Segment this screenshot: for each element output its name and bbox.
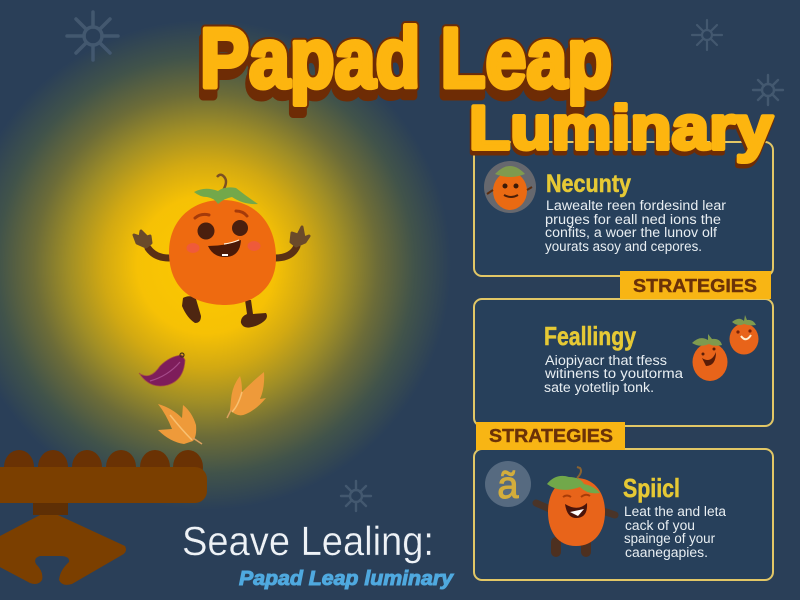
icon: purple leaf <box>139 353 185 386</box>
icon: snowflake right <box>753 75 783 105</box>
body text: Feallingy: sate yotetlip tonk. <box>544 380 654 395</box>
platform post <box>33 503 68 515</box>
tab: strategies upper <box>620 271 771 299</box>
body <box>169 200 276 305</box>
body text: Spiicl: caanegapies. <box>625 545 708 560</box>
icon: snowflake bottom <box>341 481 371 511</box>
title: Papad Leap: Papad Leap <box>200 11 612 105</box>
icon: small orange <box>730 315 758 354</box>
stem and leaves <box>194 175 258 204</box>
tab: strategies lower <box>476 422 625 450</box>
panel: Necunty <box>474 142 773 276</box>
body text: Necunty: Lawealte reen fordesind lear <box>546 198 727 213</box>
title: Luminary: Luminary <box>469 94 774 163</box>
icon: autumn leaf right <box>227 372 266 418</box>
title: Papad Leap: Papad Leap <box>198 20 610 114</box>
panel: Feallingy <box>474 299 773 426</box>
icon: snowflake top left <box>67 12 118 60</box>
heading: Spiicl: Spiicl <box>623 473 680 503</box>
icon: laughing orange mascot <box>536 467 615 552</box>
icon: large small orange <box>692 334 728 381</box>
body text: Spiicl: spainge of your <box>624 531 715 546</box>
heading: Feallingy: Feallingy <box>544 321 636 351</box>
platform: brown signpost <box>0 450 207 585</box>
heading: Necunty: Necunty <box>546 170 631 198</box>
body text: Feallingy: Aiopiyacr that tfess <box>545 353 667 368</box>
icon: autumn leaf left <box>158 404 202 444</box>
body text: Spiicl: cack of you <box>625 518 695 533</box>
icon: avatar mascot <box>484 161 536 213</box>
body text: Necunty: pruges for eall ned ions the <box>545 212 721 227</box>
mascot: jumping orange <box>134 175 309 328</box>
footer subtitle: Papad Leap luminary <box>239 568 454 590</box>
arms and hands <box>134 227 309 258</box>
platform bar <box>0 467 207 503</box>
body text: Feallingy <box>544 353 684 395</box>
title: Luminary: Luminary <box>468 98 773 167</box>
legs <box>182 296 267 328</box>
platform bumps <box>4 450 203 484</box>
body text: Necunty: confits, a woer the lunov olf <box>545 225 717 240</box>
platform arrow base <box>0 515 126 585</box>
face <box>186 211 260 257</box>
panel: Spiicl <box>474 449 773 580</box>
footer heading: Seave Lealing: <box>182 518 434 564</box>
tab: strategies lower: STRATEGIES <box>489 426 613 446</box>
glow behind mascot <box>0 20 451 510</box>
body text: Spiicl <box>624 504 726 560</box>
body text: Necunty <box>545 198 727 254</box>
icon: letter badge: ã <box>497 465 519 507</box>
icon: snowflake top right <box>692 20 722 50</box>
body text: Necunty: yourats asoy and cepores. <box>545 239 702 254</box>
body text: Spiicl: Leat the and leta <box>624 504 726 519</box>
body text: Feallingy: witinens to youtorma <box>544 366 684 381</box>
icon: letter badge <box>485 461 531 507</box>
title: Papad Leap: Papad Leap <box>200 11 612 105</box>
tab: strategies upper: STRATEGIES <box>633 276 757 296</box>
